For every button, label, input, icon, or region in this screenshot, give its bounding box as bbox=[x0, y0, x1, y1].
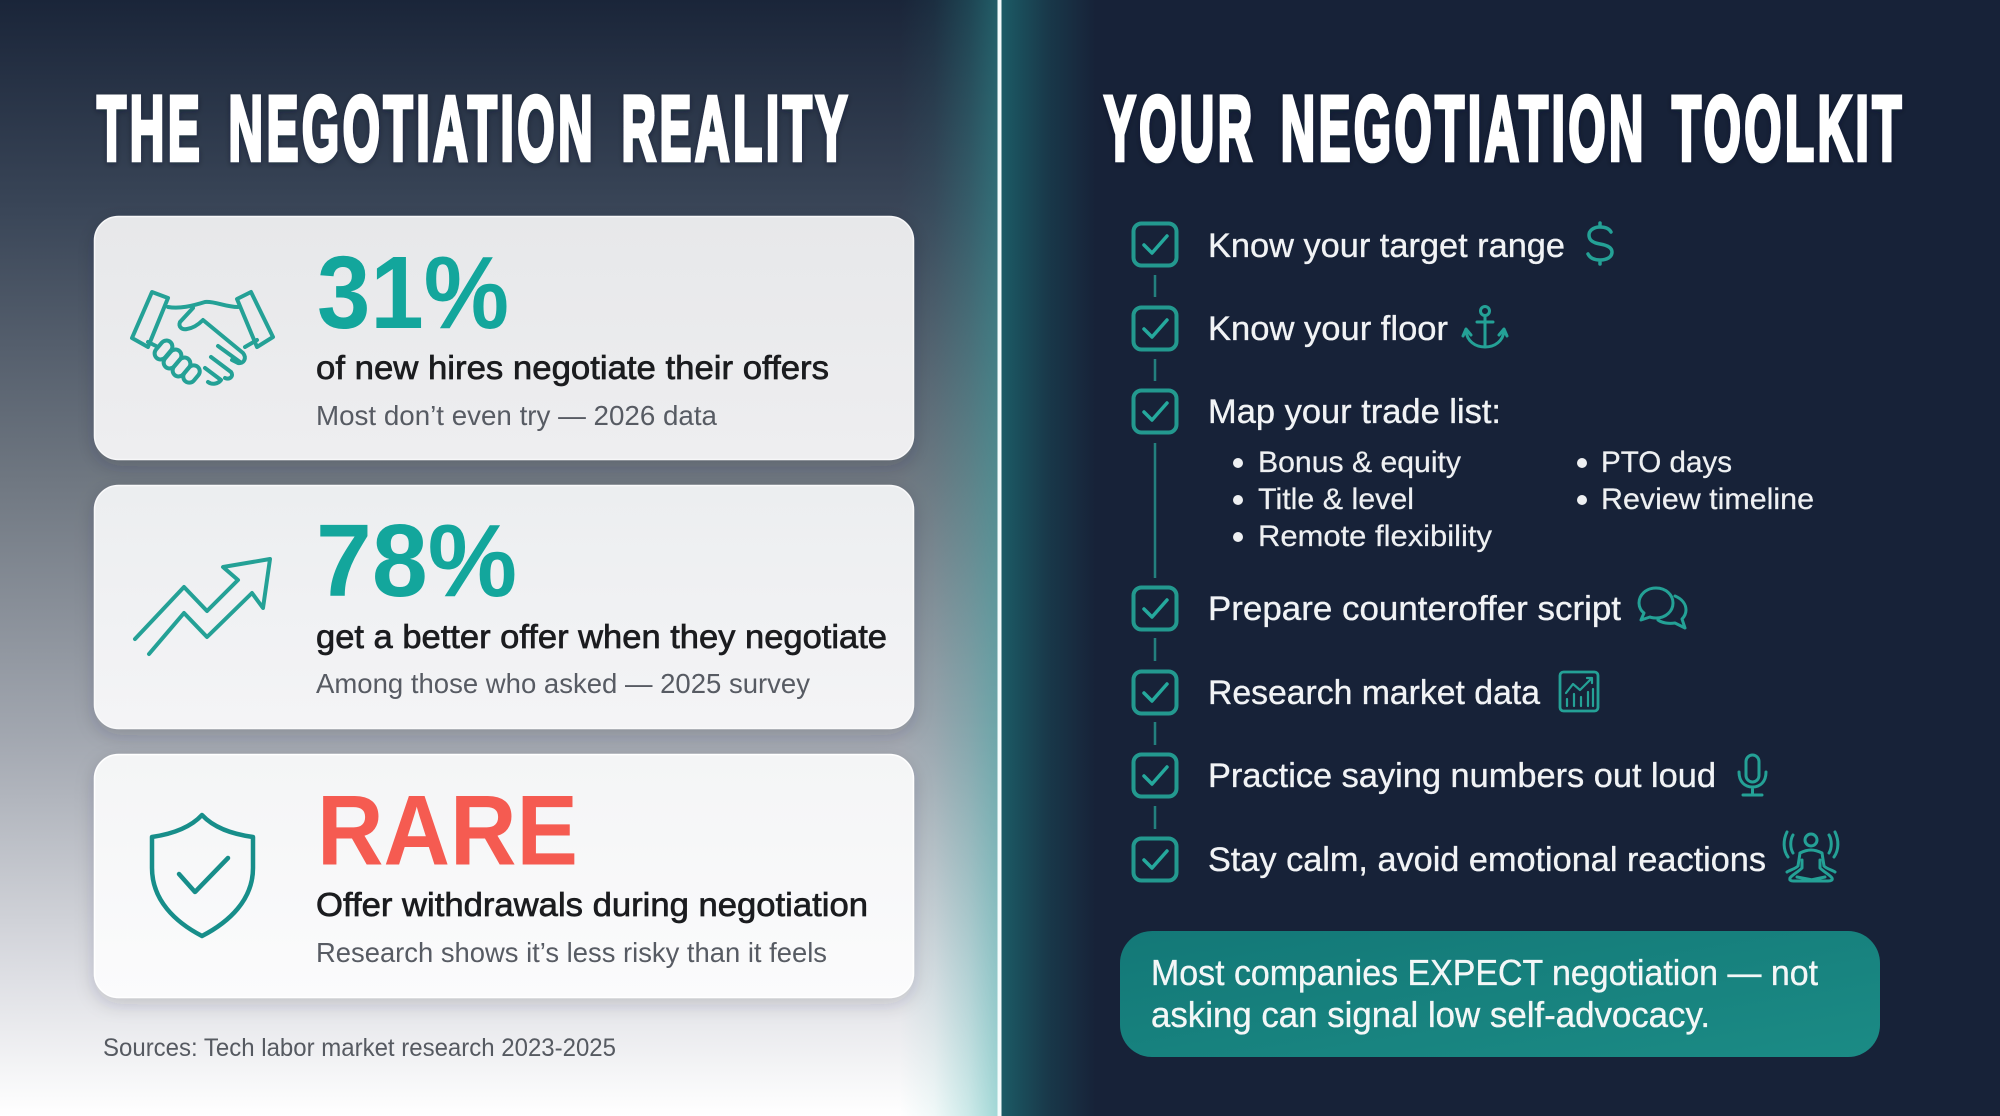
label: of new hires: of new hires negotiate their offers bbox=[316, 349, 829, 386]
icon: microphone bbox=[1739, 755, 1766, 795]
item: counteroffer script bbox=[1134, 588, 1686, 630]
item: practice numbers: Practice saying numbers out loud bbox=[1208, 757, 1716, 795]
label: offer withdrawals: Offer withdrawals during negotiation bbox=[316, 886, 868, 923]
note: 2025 survey: Among those who asked — 2025 survey bbox=[316, 668, 810, 699]
icon: rising arrow bbox=[135, 559, 270, 654]
icon: anchor bbox=[1463, 306, 1507, 347]
callout: companies expect negotiation: Most companies EXPECT negotiation — not bbox=[1151, 952, 1818, 993]
trade list bullets bbox=[1233, 446, 1814, 553]
icon: chat bubbles bbox=[1639, 588, 1686, 628]
connector lines bbox=[1154, 275, 1156, 829]
stat: rare: RARE bbox=[317, 774, 578, 886]
panel: left background bbox=[0, 0, 998, 1116]
trade list bullets: Remote flexibility bbox=[1258, 520, 1492, 553]
icon: chart bbox=[1560, 672, 1598, 711]
label: better offer: get a better offer when they negotiate bbox=[316, 618, 887, 655]
item: stay calm: Stay calm, avoid emotional reactions bbox=[1208, 841, 1766, 879]
item: trade list: Map your trade list: bbox=[1208, 393, 1501, 431]
panel: rare stat card bbox=[94, 754, 914, 998]
panel: right background bbox=[1001, 0, 2000, 1116]
checklist bbox=[1134, 223, 1838, 881]
item: trade list bbox=[1134, 390, 1814, 553]
item: target range: Know your target range bbox=[1208, 227, 1565, 265]
sources note: Sources: Tech labor market research 2023-2025 bbox=[103, 1034, 616, 1062]
item: counteroffer script: Prepare counteroffer script bbox=[1208, 590, 1622, 628]
icon: meditation bbox=[1784, 832, 1838, 881]
item: floor bbox=[1134, 306, 1507, 350]
note: less risky: Research shows it’s less risky than it feels bbox=[316, 937, 827, 968]
item: market data: Research market data bbox=[1208, 674, 1540, 712]
trade list bullets: Review timeline bbox=[1601, 483, 1814, 516]
center divider bbox=[998, 0, 1002, 1116]
note: 2026 data: Most don’t even try — 2026 data bbox=[316, 400, 717, 431]
trade list bullets: Title & level bbox=[1258, 483, 1414, 516]
item: floor: Know your floor bbox=[1208, 310, 1448, 348]
panel: 31% stat card bbox=[94, 216, 914, 460]
panel: 78% stat card bbox=[94, 486, 914, 728]
icon: shield check bbox=[152, 815, 253, 936]
icon: handshake bbox=[132, 292, 273, 385]
item: stay calm bbox=[1134, 832, 1838, 881]
stat: 78%: 78% bbox=[316, 503, 517, 618]
item: target range bbox=[1134, 223, 1612, 266]
trade list bullets: Bonus & equity bbox=[1258, 446, 1461, 479]
heading: the negotiation reality: THE NEGOTIATION REALITY bbox=[97, 78, 851, 180]
callout: companies expect negotiation bbox=[1120, 931, 1880, 1057]
icon: dollar bbox=[1588, 223, 1612, 264]
callout: companies expect negotiation: asking can signal low self-advocacy. bbox=[1151, 994, 1710, 1035]
item: market data bbox=[1134, 672, 1598, 714]
stat: 31%: 31% bbox=[317, 235, 509, 350]
trade list bullets: PTO days bbox=[1601, 446, 1732, 479]
